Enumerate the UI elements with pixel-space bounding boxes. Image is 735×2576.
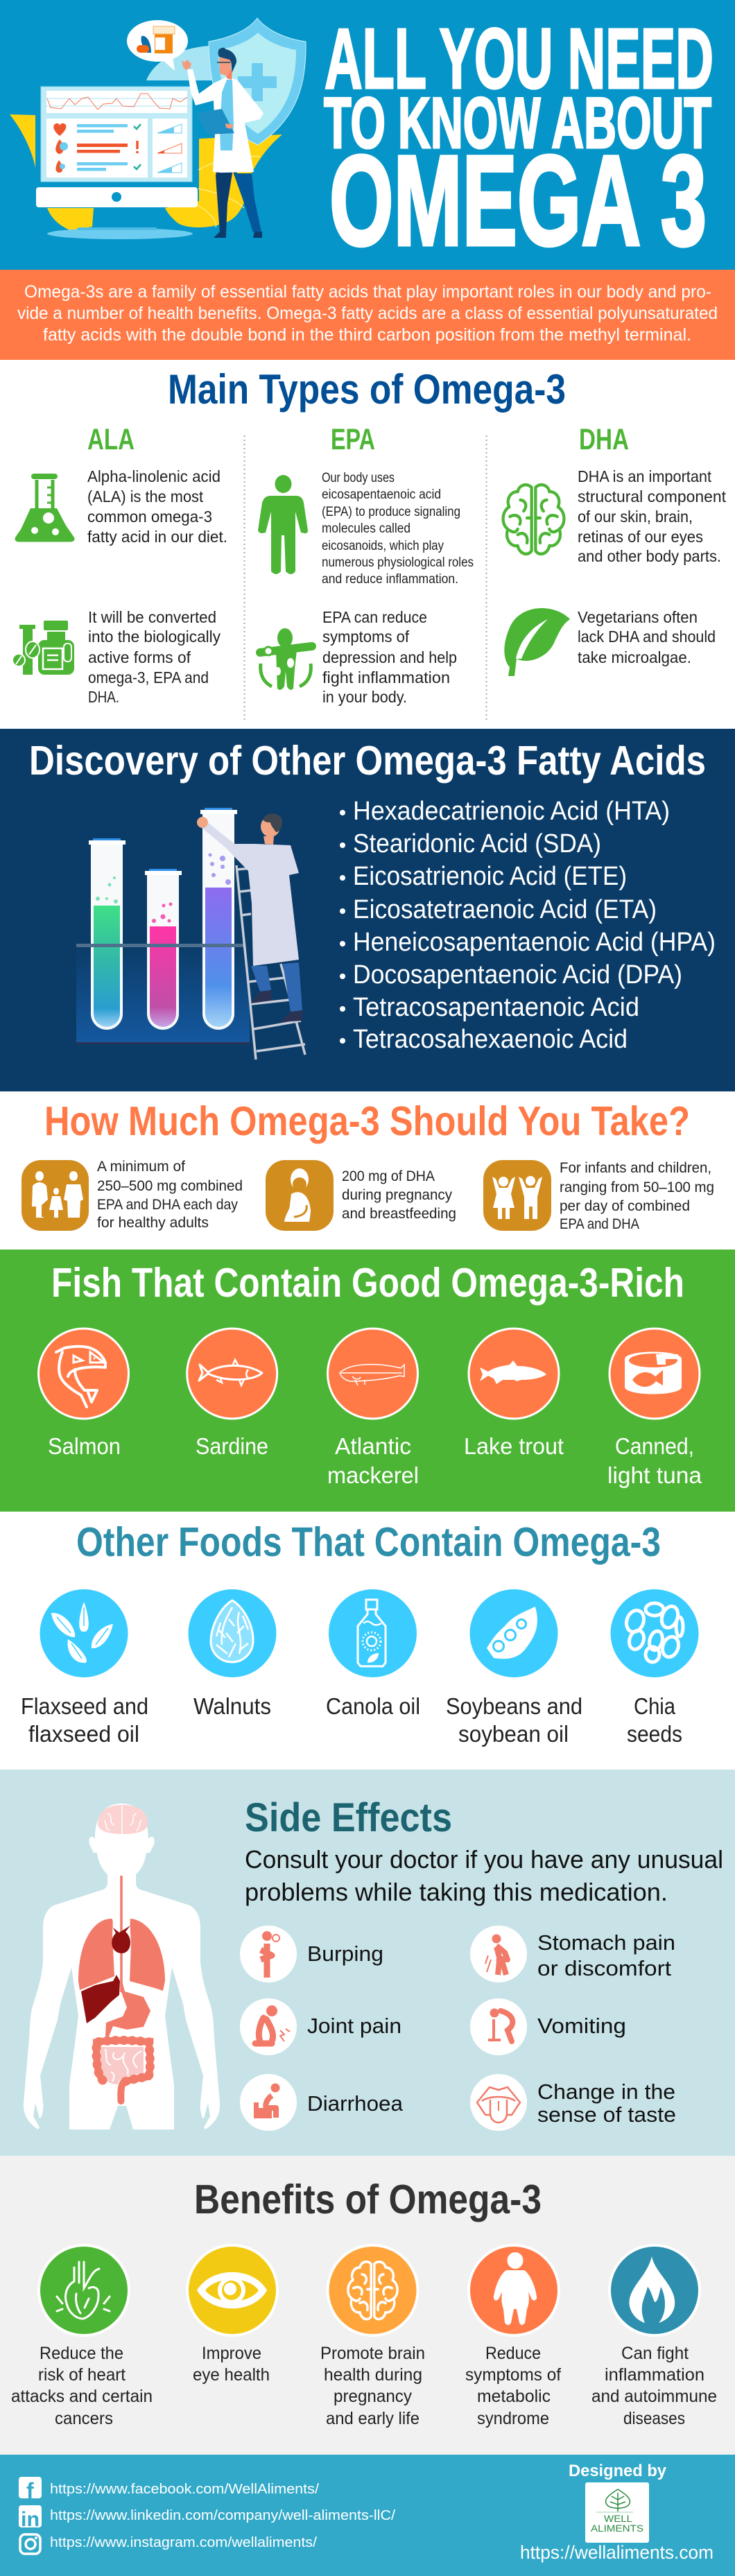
panel: how much omega-3 bbox=[0, 1091, 735, 1250]
item: healthy adults: A minimum of bbox=[97, 1159, 185, 1175]
list: other omega-3 fatty acids: Hexadecatrienoic Acid (HTA) bbox=[353, 797, 670, 826]
item: infants and children bbox=[483, 1160, 714, 1232]
text: EPA description: eicosanoids, which play bbox=[322, 539, 444, 553]
list: other omega-3 fatty acids: Eicosatrienoic Acid (ETE) bbox=[353, 862, 627, 891]
panel: introduction: Omega-3s are a family of essential fatty acids that play important roles in our body and pro- bbox=[24, 282, 711, 302]
text: DHA vegetarians: lack DHA and should bbox=[578, 628, 716, 646]
link: linkedin: https://www.linkedin.com/company/well-aliments-llC/ bbox=[50, 2508, 395, 2523]
item: salmon bbox=[39, 1329, 129, 1459]
icon: instagram bbox=[20, 2534, 40, 2554]
text: designed by: Designed by bbox=[569, 2462, 667, 2480]
text: EPA benefit: symptoms of bbox=[322, 628, 410, 646]
text: EPA benefit: depression and help bbox=[322, 648, 457, 666]
item: canned tuna: light tuna bbox=[607, 1462, 702, 1488]
item: canola oil: Canola oil bbox=[326, 1693, 420, 1719]
link: facebook: https://www.facebook.com/WellAliments/ bbox=[50, 2482, 319, 2497]
item: pregnancy: and breastfeeding bbox=[342, 1206, 456, 1222]
panel: header bbox=[0, 0, 735, 273]
item: canola oil bbox=[326, 1589, 420, 1719]
item: brain: and early life bbox=[326, 2409, 420, 2428]
monitor bbox=[41, 87, 192, 182]
scientist bbox=[251, 966, 271, 992]
panel: fish bbox=[0, 1250, 735, 1512]
panel: introduction: vide a number of health benefits. Omega-3 fatty acids are a class of essential polyunsaturated bbox=[17, 304, 718, 323]
item: lake trout: Lake trout bbox=[464, 1433, 564, 1459]
text: ALA conversion: DHA. bbox=[88, 688, 119, 706]
item: joint pain: Joint pain bbox=[307, 2014, 401, 2038]
item: infants and children: For infants and children, bbox=[560, 1160, 711, 1176]
illustration: human body with organs bbox=[24, 1804, 220, 2129]
text: ALA description: fatty acid in our diet. bbox=[87, 528, 227, 546]
item: healthy adults: for healthy adults bbox=[97, 1215, 209, 1231]
item: chia seeds bbox=[610, 1589, 699, 1747]
text: EPA description: eicosapentaenoic acid bbox=[322, 487, 441, 502]
speech bubble with medicine bbox=[127, 20, 188, 62]
item: flame: and autoimmune bbox=[591, 2387, 717, 2406]
item: walnuts bbox=[189, 1589, 276, 1719]
item: burping bbox=[240, 1926, 383, 1982]
illustration: test tubes and scientist bbox=[76, 808, 305, 1060]
text: ALA description: Alpha-linolenic acid bbox=[87, 467, 220, 485]
yellow leaves behind monitor bbox=[10, 114, 35, 168]
item: child body: syndrome bbox=[477, 2409, 549, 2428]
item: lake trout bbox=[464, 1329, 564, 1459]
item: chia seeds: seeds bbox=[627, 1721, 682, 1747]
item: atlantic mackerel: Atlantic bbox=[335, 1433, 411, 1459]
item: soybeans: Soybeans and bbox=[446, 1693, 582, 1719]
item: pregnancy: during pregnancy bbox=[342, 1187, 452, 1203]
text: EPA description: (EPA) to produce signaling bbox=[322, 505, 460, 519]
list: other omega-3 fatty acids: Eicosatetraenoic Acid (ETA) bbox=[353, 895, 657, 924]
item: flaxseed: Flaxseed and bbox=[21, 1693, 148, 1719]
icon: facebook bbox=[19, 2477, 42, 2503]
panel: introduction: fatty acids with the double bond in the third carbon position from the methyl terminal. bbox=[43, 325, 691, 345]
column: DHA: DHA bbox=[579, 423, 629, 456]
text: DHA description: of our skin, brain, bbox=[578, 508, 693, 526]
item: heart: cancers bbox=[55, 2409, 113, 2428]
item: canned tuna: Canned, bbox=[615, 1433, 694, 1459]
text: EPA benefit: EPA can reduce bbox=[322, 608, 427, 626]
icon: person bbox=[258, 475, 308, 574]
list: other omega-3 fatty acids: Tetracosahexaenoic Acid bbox=[353, 1025, 628, 1054]
item: pregnancy: 200 mg of DHA bbox=[342, 1168, 435, 1184]
doctor bbox=[225, 150, 261, 232]
list: other omega-3 fatty acids: Heneicosapentaenoic Acid (HPA) bbox=[353, 928, 716, 957]
panel: introduction bbox=[0, 270, 735, 360]
item: sardine bbox=[187, 1329, 277, 1459]
text: consult your doctor: Consult your doctor if you have any unusual bbox=[245, 1845, 723, 1874]
item: diarrhoea bbox=[240, 2074, 404, 2131]
list: other omega-3 fatty acids bbox=[340, 797, 716, 1054]
text: ALA description bbox=[87, 467, 227, 546]
text: EPA description bbox=[322, 471, 474, 587]
link: instagram: https://www.instagram.com/wellaliments/ bbox=[50, 2535, 317, 2550]
column: DHA bbox=[503, 423, 727, 676]
icon: leaf bbox=[504, 608, 570, 676]
item: eye bbox=[187, 2245, 277, 2385]
text: DHA vegetarians bbox=[578, 608, 716, 666]
illustration: doctor with monitor and shield bbox=[10, 18, 306, 239]
item: flame: diseases bbox=[623, 2409, 685, 2428]
panel: side effects bbox=[0, 1770, 735, 2156]
item: heart bbox=[11, 2245, 153, 2428]
text: DHA description: and other body parts. bbox=[578, 547, 721, 565]
text: ALA conversion: into the biologically bbox=[88, 628, 220, 646]
icon: brain bbox=[503, 485, 564, 554]
item: soybeans bbox=[446, 1589, 582, 1747]
icon: body with inflamed joints bbox=[260, 628, 312, 690]
text: consult your doctor bbox=[245, 1845, 723, 1906]
column: EPA: EPA bbox=[331, 423, 375, 456]
item: walnuts: Walnuts bbox=[193, 1693, 271, 1719]
item: healthy adults: EPA and DHA each day bbox=[97, 1197, 238, 1213]
item: brain: pregnancy bbox=[334, 2387, 412, 2406]
item: atlantic mackerel: mackerel bbox=[327, 1462, 419, 1488]
column: EPA bbox=[258, 423, 474, 706]
list: other omega-3 fatty acids: Docosapentaenoic Acid (DPA) bbox=[353, 960, 682, 989]
item: infants and children: per day of combined bbox=[560, 1198, 690, 1214]
panel: discovery of other fatty acids bbox=[0, 729, 735, 1091]
bubbles bbox=[96, 876, 118, 904]
logo: well aliments: ALIMENTS bbox=[591, 2523, 643, 2534]
item: soybeans: soybean oil bbox=[458, 1721, 569, 1747]
item: heart: attacks and certain bbox=[11, 2387, 153, 2406]
text: EPA description: and reduce inflammation. bbox=[322, 572, 458, 587]
column: ALA: ALA bbox=[87, 423, 135, 456]
logo: well aliments: WELL bbox=[604, 2513, 632, 2524]
item: child body bbox=[465, 2245, 561, 2428]
item: canned tuna bbox=[607, 1329, 702, 1488]
text: DHA vegetarians: Vegetarians often bbox=[578, 608, 698, 626]
item: eye: Improve bbox=[202, 2344, 261, 2363]
item: diarrhoea: Diarrhoea bbox=[307, 2091, 404, 2116]
text: DHA description bbox=[578, 467, 727, 565]
list: other omega-3 fatty acids: Tetracosapentaenoic Acid bbox=[353, 993, 639, 1022]
text: consult your doctor: problems while taking this medication. bbox=[245, 1878, 668, 1906]
item: chia seeds: Chia bbox=[634, 1693, 676, 1719]
item: burping: Burping bbox=[307, 1942, 383, 1966]
text: EPA description: Our body uses bbox=[322, 471, 395, 485]
logo: well aliments bbox=[585, 2482, 649, 2543]
icon: flask bbox=[16, 474, 74, 540]
item: flame: inflammation bbox=[605, 2365, 704, 2385]
item: brain: Promote brain bbox=[320, 2344, 425, 2363]
panel: other foods bbox=[0, 1512, 735, 1770]
item: child body: symptoms of bbox=[465, 2365, 561, 2385]
item: pregnancy bbox=[266, 1160, 456, 1231]
text: EPA description: molecules called bbox=[322, 521, 410, 536]
text: EPA benefit: in your body. bbox=[322, 688, 407, 706]
item: heart: risk of heart bbox=[38, 2365, 126, 2385]
item: flaxseed bbox=[21, 1589, 148, 1747]
item: vomiting bbox=[470, 1998, 626, 2055]
text: ALA description: (ALA) is the most bbox=[87, 487, 204, 505]
item: sardine: Sardine bbox=[196, 1433, 268, 1459]
list: other omega-3 fatty acids: Stearidonic Acid (SDA) bbox=[353, 829, 601, 858]
link: website: https://wellaliments.com bbox=[520, 2542, 714, 2563]
text: EPA description: numerous physiological roles bbox=[322, 555, 474, 570]
item: joint pain bbox=[240, 1998, 401, 2055]
column: ALA bbox=[12, 423, 227, 706]
item: child body: metabolic bbox=[477, 2387, 551, 2406]
item: flame: Can fight bbox=[621, 2344, 689, 2363]
panel: footer bbox=[0, 2455, 735, 2576]
icon: linkedin: in bbox=[21, 2508, 40, 2531]
item: child body: Reduce bbox=[485, 2344, 541, 2363]
ladder bbox=[236, 865, 305, 1060]
item: eye: eye health bbox=[193, 2365, 270, 2385]
text: EPA benefit bbox=[322, 608, 457, 706]
text: DHA description: retinas of our eyes bbox=[578, 528, 703, 546]
item: stomach pain: Stomach pain bbox=[537, 1930, 675, 1955]
item: change in taste bbox=[470, 2074, 676, 2131]
item: stomach pain bbox=[470, 1926, 675, 1982]
item: change in taste: sense of taste bbox=[537, 2102, 676, 2127]
icon: medicine bottles bbox=[12, 621, 74, 675]
item: flaxseed: flaxseed oil bbox=[28, 1721, 139, 1747]
item: infants and children: ranging from 50–100 mg bbox=[560, 1179, 714, 1195]
item: atlantic mackerel bbox=[327, 1329, 419, 1488]
item: heart: Reduce the bbox=[40, 2344, 123, 2363]
item: vomiting: Vomiting bbox=[537, 2014, 626, 2038]
tubes bbox=[91, 845, 123, 1030]
item: stomach pain: or discomfort bbox=[537, 1956, 671, 1980]
item: change in taste: Change in the bbox=[537, 2080, 675, 2104]
text: EPA benefit: fight inflammation bbox=[322, 668, 450, 686]
panel: benefits bbox=[0, 2156, 735, 2455]
text: DHA vegetarians: take microalgae. bbox=[578, 648, 691, 666]
item: healthy adults: 250–500 mg combined bbox=[97, 1178, 243, 1194]
text: DHA description: structural component bbox=[578, 487, 727, 505]
text: ALA conversion: It will be converted bbox=[88, 608, 216, 626]
shield bbox=[209, 18, 306, 145]
panel: main types of omega-3 bbox=[0, 360, 735, 729]
title bbox=[324, 12, 714, 273]
heading: side effects: Side Effects bbox=[245, 1795, 452, 1840]
item: brain: health during bbox=[324, 2365, 422, 2385]
item: infants and children: EPA and DHA bbox=[560, 1216, 639, 1232]
text: ALA conversion bbox=[88, 608, 220, 706]
text: DHA description: DHA is an important bbox=[578, 467, 712, 485]
heading: main types: Main Types of Omega-3 bbox=[168, 366, 566, 413]
text: ALA conversion: active forms of bbox=[88, 648, 191, 666]
item: brain bbox=[320, 2245, 425, 2428]
heading: benefits: Benefits of Omega-3 bbox=[194, 2177, 542, 2222]
item: flame bbox=[591, 2245, 717, 2428]
text: ALA conversion: omega-3, EPA and bbox=[88, 668, 209, 686]
text: ALA description: common omega-3 bbox=[87, 508, 212, 526]
item: salmon: Salmon bbox=[48, 1433, 121, 1459]
icon: facebook: f bbox=[26, 2478, 34, 2503]
item: healthy adults bbox=[21, 1159, 243, 1231]
